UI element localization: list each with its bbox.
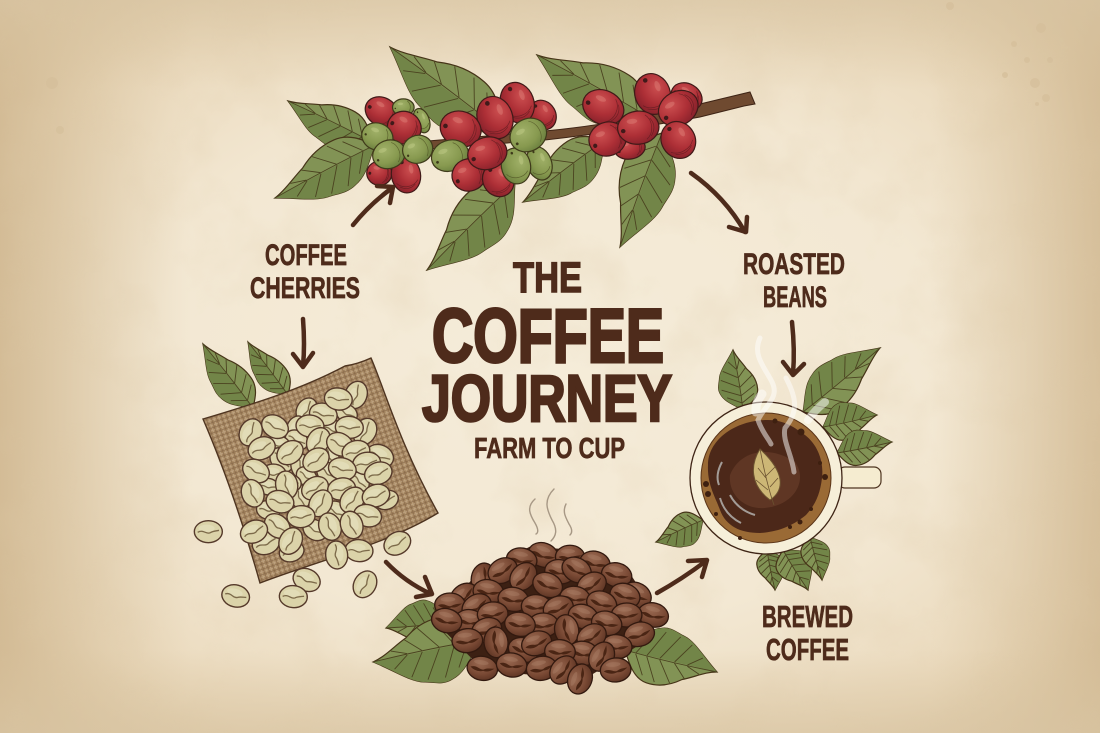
arrow: branch to roasted beans label xyxy=(691,173,747,232)
arrow: cherries label to green beans xyxy=(293,319,313,367)
leaves behind sack xyxy=(188,333,299,420)
green coffee beans xyxy=(194,378,415,610)
label: brewed coffee: BREWED xyxy=(762,599,853,634)
coffee surface xyxy=(708,420,822,533)
arrow: roasted beans label to cup xyxy=(783,322,804,375)
burlap sack xyxy=(203,358,438,583)
arrow: green beans to roasted pile xyxy=(386,562,432,597)
cup rim xyxy=(690,402,842,554)
leaves on branch xyxy=(264,24,689,291)
green beans on burlap illustration xyxy=(188,333,438,610)
coffee cherry branch illustration xyxy=(264,24,755,291)
roasted coffee beans xyxy=(429,538,671,697)
roasted beans pile illustration xyxy=(367,489,724,698)
brewed coffee cup illustration xyxy=(649,329,895,598)
leaves under pile xyxy=(367,598,724,698)
arrow: roasted pile to cup xyxy=(657,560,707,593)
label: brewed coffee: COFFEE xyxy=(766,632,849,667)
label: brewed coffee xyxy=(762,599,853,667)
label: coffee cherries: COFFEE xyxy=(265,239,347,272)
leaves behind cup xyxy=(649,329,895,598)
foam bubbles xyxy=(703,418,828,540)
label: coffee cherries: CHERRIES xyxy=(250,272,360,305)
steam lines xyxy=(530,489,572,541)
coffee swirls xyxy=(718,452,800,523)
rising steam xyxy=(756,338,825,472)
subtitle: FARM TO CUP xyxy=(474,433,625,465)
title block xyxy=(422,254,672,465)
label: roasted beans: ROASTED xyxy=(743,248,845,281)
label: roasted beans: BEANS xyxy=(763,281,827,314)
branch stem xyxy=(428,92,755,149)
title: the: THE xyxy=(513,254,582,302)
cup handle xyxy=(838,467,881,488)
foam ring xyxy=(701,413,831,543)
leaf on coffee xyxy=(753,449,780,505)
title: journey: JOURNEY xyxy=(422,361,672,435)
cherries xyxy=(358,69,707,202)
title: coffee: COFFEE xyxy=(432,294,664,379)
arrow: cherries label to branch xyxy=(353,186,393,225)
label: coffee cherries xyxy=(250,239,360,305)
label: roasted beans xyxy=(743,248,845,314)
